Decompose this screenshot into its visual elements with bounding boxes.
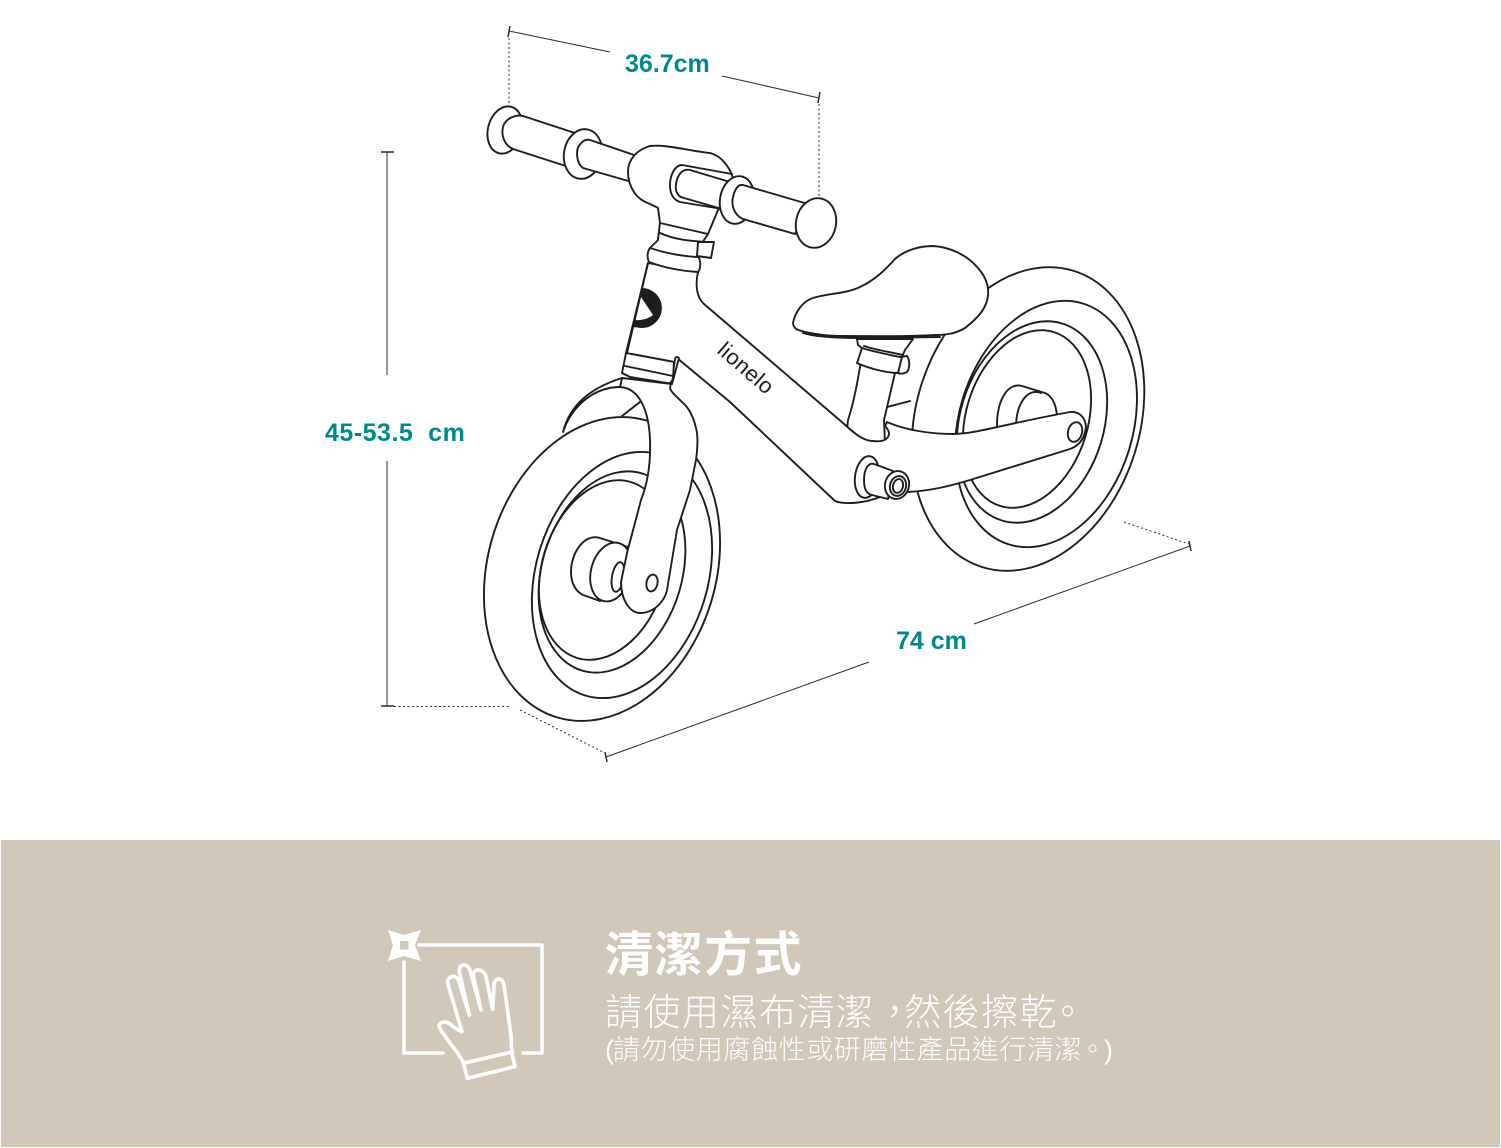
heading: cleaning method: 清潔方式 — [605, 929, 803, 982]
caution text: 。 — [1079, 1035, 1106, 1065]
front mudguard — [563, 378, 640, 432]
rear wheel — [876, 238, 1180, 600]
head tube upper collars — [648, 222, 714, 272]
front fork — [620, 357, 698, 613]
dimension: length: 74 cm — [896, 627, 967, 655]
saddle — [793, 246, 988, 338]
brand name: lionelo — [713, 337, 779, 399]
instruction text: 然後擦乾 — [904, 992, 1058, 1033]
frame and rear fork — [626, 263, 1086, 503]
brand logo on frame — [626, 263, 662, 353]
footrest peg — [852, 455, 912, 502]
dimension: handlebar width — [508, 26, 820, 196]
dimension: height: 45-53.5 cm — [325, 419, 465, 447]
right grip — [716, 173, 841, 252]
handlebar stem — [628, 146, 733, 234]
head tube lower collar — [622, 353, 674, 383]
instruction text: 請使用濕布清潔 — [605, 992, 874, 1033]
instruction text: ， — [876, 992, 913, 1033]
dimension: length — [605, 522, 1191, 762]
balance bike illustration — [448, 102, 1180, 751]
icon: hand wiping a clean surface — [388, 930, 542, 1078]
caution text: ( — [605, 1035, 614, 1065]
dimension: height — [325, 152, 605, 753]
seat post — [846, 339, 913, 445]
front wheel — [448, 387, 756, 751]
instruction text: 。 — [1049, 992, 1086, 1033]
caution text: ) — [1104, 1035, 1113, 1065]
dimension: handlebar width: 36.7cm — [625, 50, 710, 78]
left grip — [482, 102, 640, 182]
cleaning panel background — [1, 840, 1500, 1147]
caution text: 請勿使用腐蝕性或研磨性產品進行清潔 — [613, 1035, 1082, 1065]
